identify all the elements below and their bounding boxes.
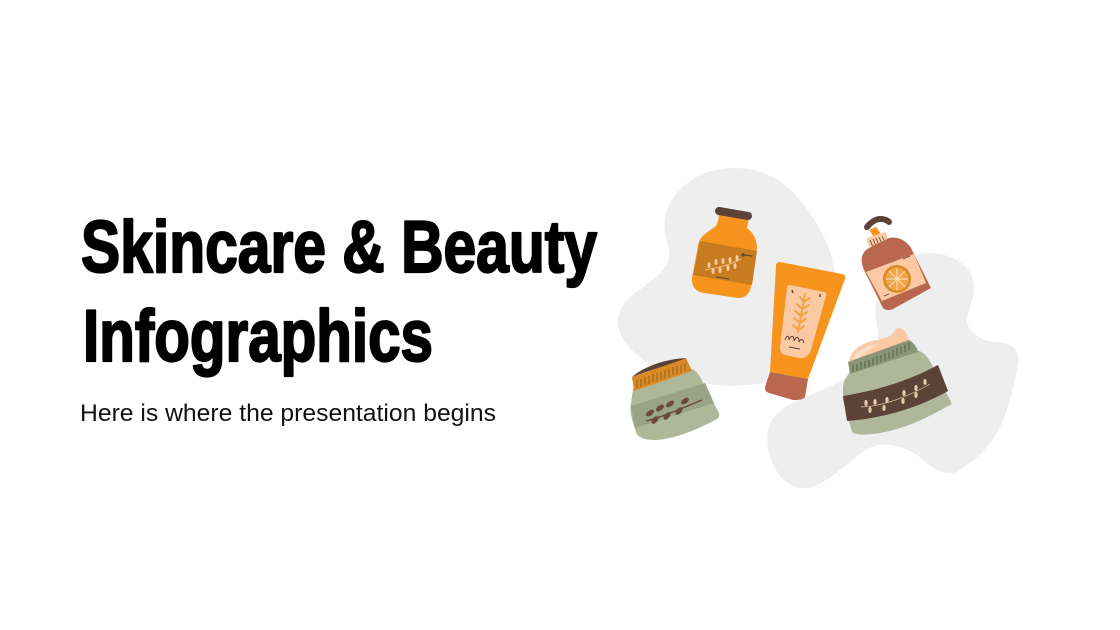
title <box>81 207 597 377</box>
icon: large green jar <box>843 328 951 435</box>
subtitle: Here is where the presentation begins <box>80 400 496 427</box>
icon: orange jar <box>692 211 757 298</box>
wheat emblem on tube <box>793 294 810 332</box>
icon: pump bottle <box>862 219 931 310</box>
icon: orange tube <box>765 262 845 400</box>
title: Skincare & Beauty <box>81 207 597 288</box>
background blob: lower right <box>767 253 1018 488</box>
sprig on green jar <box>646 397 702 424</box>
title: Infographics <box>83 296 433 377</box>
sprig on orange jar <box>705 255 741 274</box>
sprig on large jar <box>861 379 930 413</box>
icon: small green jar <box>630 358 719 440</box>
background blob: upper left <box>618 168 835 386</box>
